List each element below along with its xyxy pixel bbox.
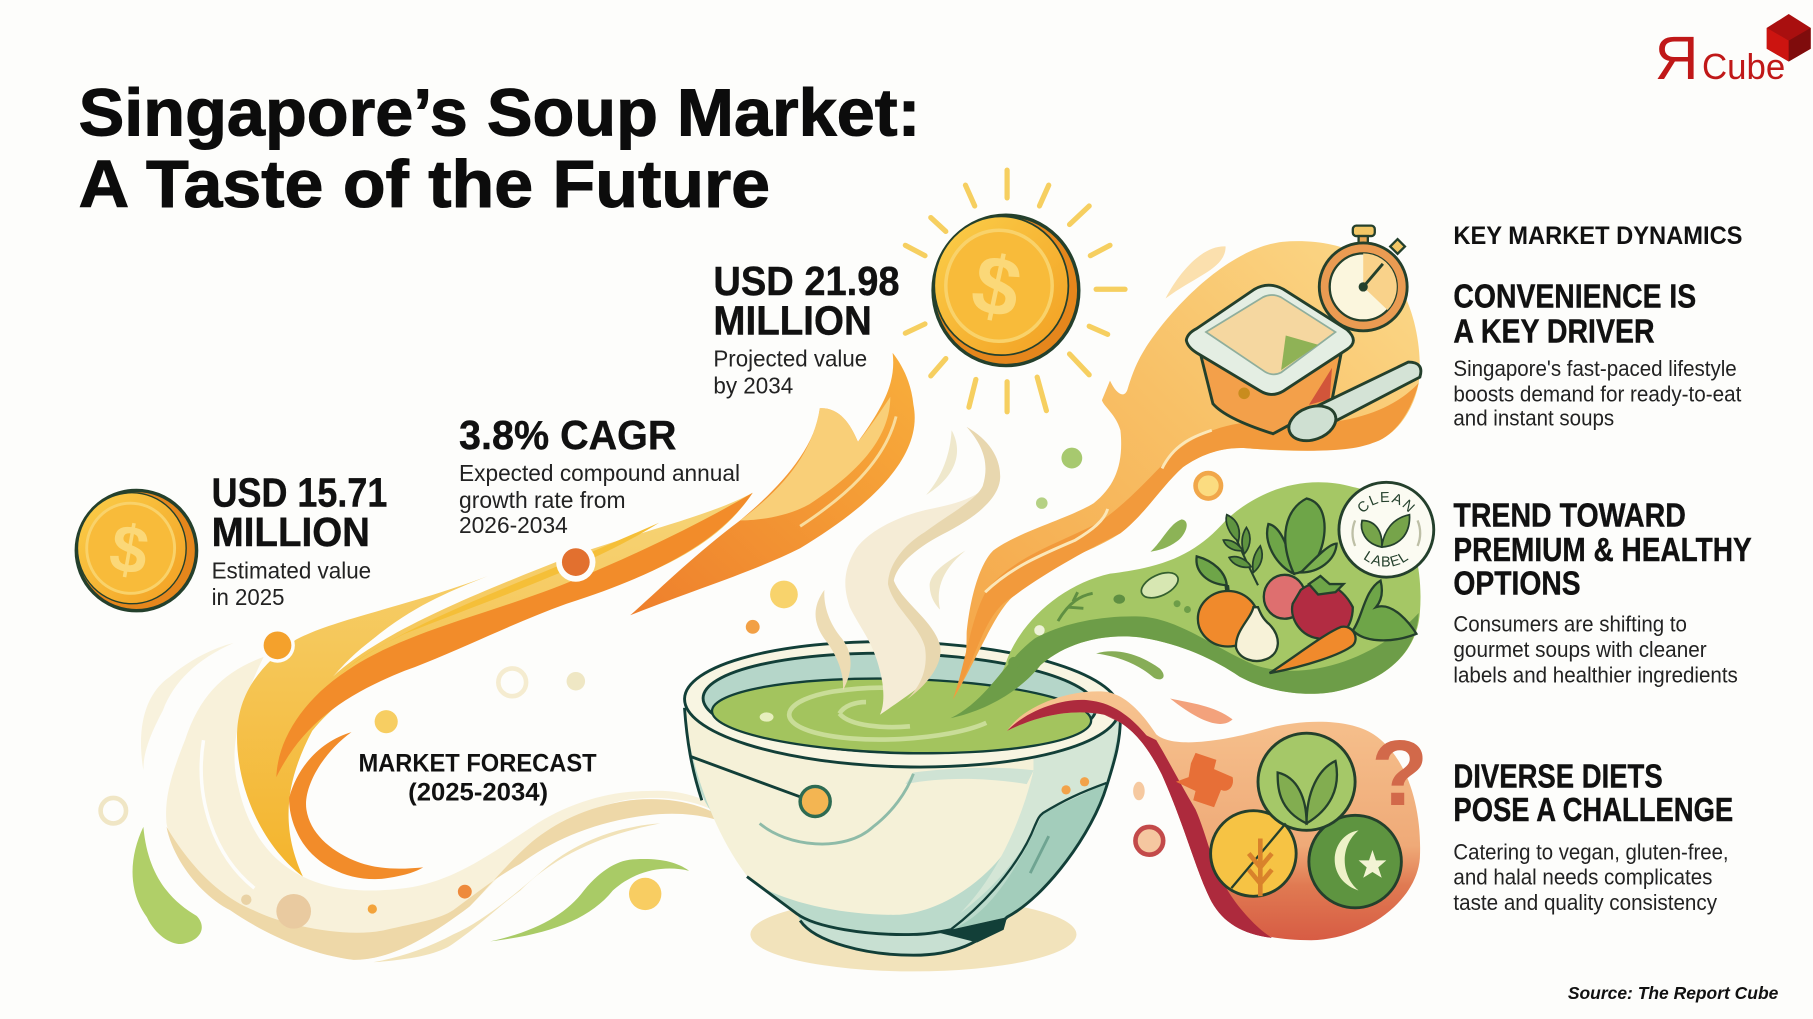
panel: convenience: boosts demand for ready-to-eat: [1453, 381, 1742, 406]
green leaf swoosh left: [133, 827, 202, 944]
icon: soup container with spoon: [1186, 285, 1421, 447]
panel: convenience: and instant soups: [1453, 406, 1614, 431]
panel: diverse diets: Catering to vegan, gluten-free,: [1453, 839, 1729, 864]
label: market forecast: MARKET FORECAST: [358, 749, 597, 777]
panel: premium and healthy: labels and healthier ingredients: [1453, 662, 1738, 687]
panel: diverse diets: taste and quality consistency: [1453, 890, 1718, 915]
source note: Source: The Report Cube: [1568, 983, 1778, 1003]
stat: USD 15.71 million: [212, 470, 387, 610]
stat: 3.8% CAGR: 3.8% CAGR: [459, 412, 676, 458]
icon: vegetables: [1196, 499, 1416, 673]
panel: premium and healthy: OPTIONS: [1453, 565, 1581, 602]
icon: puzzle piece: [1176, 753, 1233, 807]
icon: left coin: [76, 490, 197, 611]
heading: key market dynamics: KEY MARKET DYNAMICS: [1453, 222, 1742, 250]
cream wave ribbon: [141, 643, 743, 962]
title: A Taste of the Future: [79, 147, 770, 222]
label: market forecast: [358, 749, 597, 806]
sun rays: [905, 170, 1125, 412]
orange convenience stream and blob: [953, 241, 1420, 700]
stat: 3.8% CAGR: [459, 412, 740, 538]
icon: top coin: [933, 215, 1079, 366]
panel: premium and healthy: PREMIUM & HEALTHY: [1453, 532, 1752, 569]
stat: USD 15.71 million: in 2025: [212, 584, 284, 610]
panel: diverse diets: DIVERSE DIETS: [1453, 759, 1663, 796]
panel: premium and healthy: TREND TOWARD: [1453, 497, 1686, 534]
panel: convenience: [1453, 279, 1742, 431]
icon: clean label badge: CLEAN: [1358, 492, 1415, 512]
panel: premium and healthy: Consumers are shifting to: [1453, 611, 1687, 636]
stat: 3.8% CAGR: 2026-2034: [459, 512, 568, 538]
stat: USD 21.98 million: Projected value: [713, 346, 867, 372]
stat: USD 21.98 million: USD 21.98: [713, 258, 900, 304]
stat: USD 15.71 million: USD 15.71: [212, 470, 387, 516]
icon: clean label badge: [1338, 480, 1436, 579]
stat: 3.8% CAGR: Expected compound annual: [459, 460, 740, 486]
panel: convenience: CONVENIENCE IS: [1453, 279, 1696, 316]
milestone dots: [101, 376, 1221, 929]
icon: left coin: $: [104, 510, 154, 590]
stat: USD 21.98 million: by 2034: [713, 372, 793, 398]
title: Singapore’s Soup Market:: [79, 75, 920, 150]
green healthy stream and blob: [950, 482, 1421, 718]
stat: 3.8% CAGR: growth rate from: [459, 487, 626, 513]
panel: convenience: A KEY DRIVER: [1453, 313, 1655, 350]
icon: question mark: ?: [1371, 721, 1428, 825]
icon: stopwatch: [1319, 226, 1407, 331]
icon: clean label badge: LABEL: [1364, 550, 1408, 566]
steam swirls: [816, 427, 1000, 715]
panel: convenience: Singapore's fast-paced lifestyle: [1453, 356, 1737, 381]
panel: diverse diets: and halal needs complicates: [1453, 865, 1712, 890]
red challenge stream and blob: [1007, 691, 1420, 940]
label: market forecast: (2025-2034): [408, 778, 548, 806]
icon: top coin: $: [964, 236, 1029, 336]
orange C-shaped tail: [289, 732, 423, 879]
logo: RCube: Cube: [1702, 47, 1785, 87]
logo: RCube: Я: [1655, 24, 1699, 92]
bowl shadow: [750, 897, 1076, 971]
panel: diverse diets: [1453, 759, 1733, 915]
panel: diverse diets: POSE A CHALLENGE: [1453, 792, 1733, 829]
yellow and orange growth ribbon: [237, 353, 915, 877]
stat: USD 15.71 million: Estimated value: [212, 557, 371, 583]
panel: premium and healthy: gourmet soups with cleaner: [1453, 637, 1707, 662]
logo: RCube: [1655, 14, 1811, 92]
title: [79, 75, 920, 222]
icon: dietary puzzle circles: [1211, 733, 1401, 908]
panel: premium and healthy: [1453, 497, 1752, 687]
stat: USD 21.98 million: [713, 258, 900, 398]
stat: USD 15.71 million: MILLION: [212, 509, 370, 555]
icon: soup bowl: [683, 636, 1121, 955]
green swoosh under the wave: [490, 859, 689, 941]
stat: USD 21.98 million: MILLION: [713, 297, 872, 343]
